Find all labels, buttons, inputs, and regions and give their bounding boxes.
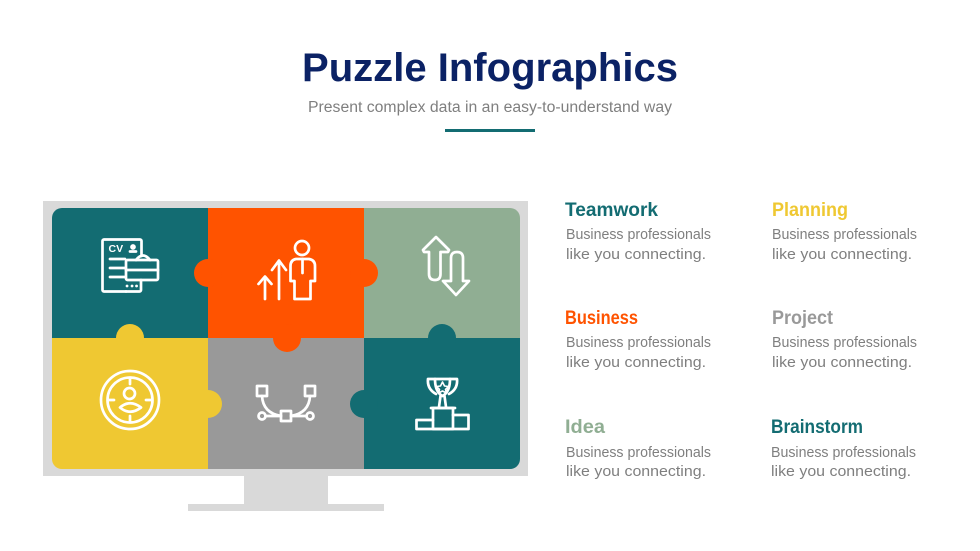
text block: Planning: Business professionals: [772, 226, 917, 243]
text block: Business: Business: [565, 308, 638, 329]
text block: Project: [772, 308, 917, 371]
puzzle piece: teal top left: [52, 208, 208, 338]
puzzle piece: yellow bottom left: [52, 338, 208, 469]
monitor: [43, 201, 528, 511]
monitor screen frame: [43, 201, 528, 476]
text block: Idea: Idea: [565, 417, 605, 438]
puzzle piece: orange top middle: [208, 208, 364, 338]
icon: CV and briefcase: [102, 240, 158, 292]
text block: Teamwork: [565, 200, 711, 263]
icon: trophy on podium: [416, 379, 468, 429]
text block: Business: Business professionals: [566, 334, 711, 351]
text block: Brainstorm: Business professionals: [771, 444, 916, 461]
text block: Brainstorm: [771, 417, 916, 480]
text block: Teamwork: Business professionals: [566, 226, 711, 243]
text block: Project: like you connecting.: [772, 354, 912, 371]
text block: Idea: like you connecting.: [566, 463, 706, 480]
icon: up and down arrows: [423, 237, 469, 295]
puzzle grid: [52, 208, 520, 469]
title underline: [445, 129, 535, 132]
text block: Business: [565, 308, 711, 371]
monitor base: [188, 504, 384, 511]
text block: Teamwork: like you connecting.: [566, 246, 706, 263]
text block: Business: like you connecting.: [566, 354, 706, 371]
text block: Teamwork: Teamwork: [565, 200, 658, 221]
text block: Idea: [565, 417, 711, 480]
text block: Planning: like you connecting.: [772, 246, 912, 263]
icon: CV and briefcase: CV: [108, 243, 123, 255]
text block: Planning: [772, 200, 917, 263]
text block: Brainstorm: like you connecting.: [771, 463, 911, 480]
text block: Idea: Business professionals: [566, 444, 711, 461]
text block: Project: Project: [772, 308, 834, 329]
puzzle piece: teal bottom right: [364, 338, 520, 469]
text block: Planning: Planning: [772, 200, 848, 221]
monitor stand: [244, 476, 328, 504]
icon: target with person: [101, 371, 159, 429]
puzzle piece: sage top right: [364, 208, 520, 338]
puzzle knobs: [116, 259, 456, 418]
subtitle: Present complex data in an easy-to-understand way: [308, 99, 672, 116]
title: Puzzle Infographics: [302, 46, 678, 90]
text block: Brainstorm: Brainstorm: [771, 417, 863, 438]
icon: growth arrows and person: [258, 241, 315, 299]
icon: bezier curve: [257, 386, 315, 421]
text block: Project: Business professionals: [772, 334, 917, 351]
puzzle piece: gray bottom middle: [208, 338, 364, 469]
